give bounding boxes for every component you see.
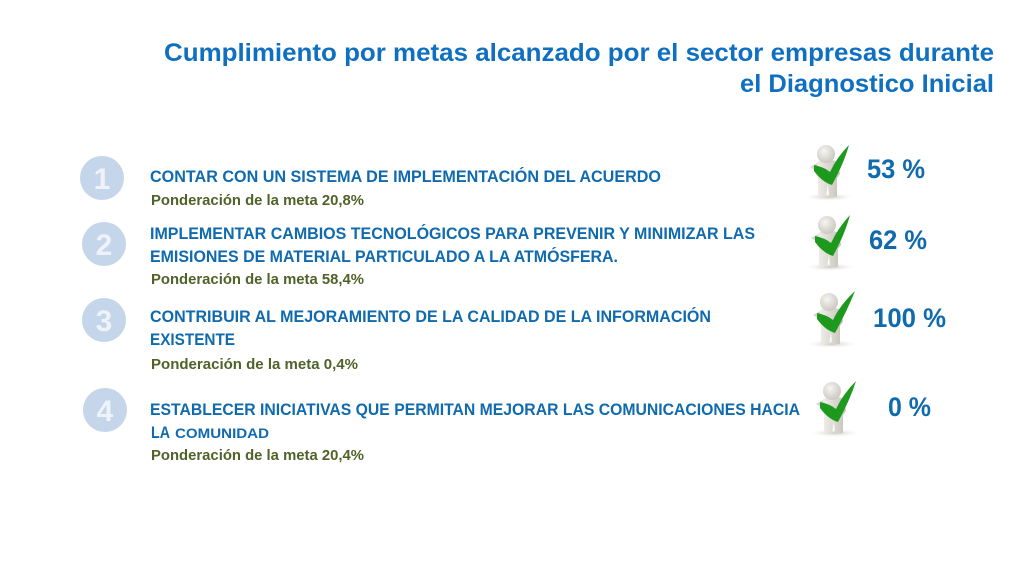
value 62 %: 62 % <box>869 225 927 255</box>
item 4 <box>83 381 931 464</box>
number badge 3 <box>82 298 126 342</box>
goal 4 text: LA <box>151 423 170 442</box>
goal 2 text: EMISIONES DE MATERIAL PARTICULADO A LA ATMÓSFERA. <box>150 247 618 266</box>
number badge 4: 4 <box>97 395 114 428</box>
goal 1 text <box>150 167 661 209</box>
goal 4 text: Ponderación de la meta 20,4% <box>151 447 364 464</box>
goal 3 text: EXISTENTE <box>150 330 235 349</box>
value 0 %: 0 % <box>888 392 931 422</box>
number badge 1: 1 <box>94 163 110 196</box>
number badge 2 <box>82 222 126 266</box>
item 1 <box>80 145 925 209</box>
number badge 1 <box>80 156 124 200</box>
goal 4 text: ESTABLECER INICIATIVAS QUE PERMITAN MEJORAR LAS COMUNICACIONES HACIA <box>150 400 800 419</box>
number badge 3: 3 <box>96 305 112 338</box>
goal 4 text: COMUNIDAD <box>175 425 269 441</box>
icon: figure with check 1 <box>804 145 854 201</box>
goal 3 text: CONTRIBUIR AL MEJORAMIENTO DE LA CALIDAD DE LA INFORMACIÓN <box>150 307 711 326</box>
icon: figure with check 3 <box>807 291 857 348</box>
value 53 %: 53 % <box>867 154 925 184</box>
goal 2 text: Ponderación de la meta 58,4% <box>151 271 364 288</box>
value 100 %: 100 % <box>873 303 946 333</box>
title <box>164 39 994 98</box>
number badge 4 <box>83 388 127 432</box>
goal 1 text: CONTAR CON UN SISTEMA DE IMPLEMENTACIÓN DEL ACUERDO <box>150 167 661 186</box>
goal 1 text: Ponderación de la meta 20,8% <box>151 192 364 209</box>
item 3 <box>82 291 946 373</box>
goal 3 text <box>150 307 711 373</box>
goal 2 text: IMPLEMENTAR CAMBIOS TECNOLÓGICOS PARA PREVENIR Y MINIMIZAR LAS <box>150 224 755 243</box>
goal 4 text <box>150 400 800 464</box>
item 2 <box>82 215 927 288</box>
icon: figure with check 2 <box>805 215 855 271</box>
goal 2 text <box>150 224 755 288</box>
goal 3 text: Ponderación de la meta 0,4% <box>151 356 358 373</box>
title: Cumplimiento por metas alcanzado por el sector empresas durante <box>164 39 994 67</box>
title: el Diagnostico Inicial <box>740 70 994 98</box>
number badge 2: 2 <box>96 229 112 262</box>
icon: figure with check 4 <box>810 381 860 437</box>
